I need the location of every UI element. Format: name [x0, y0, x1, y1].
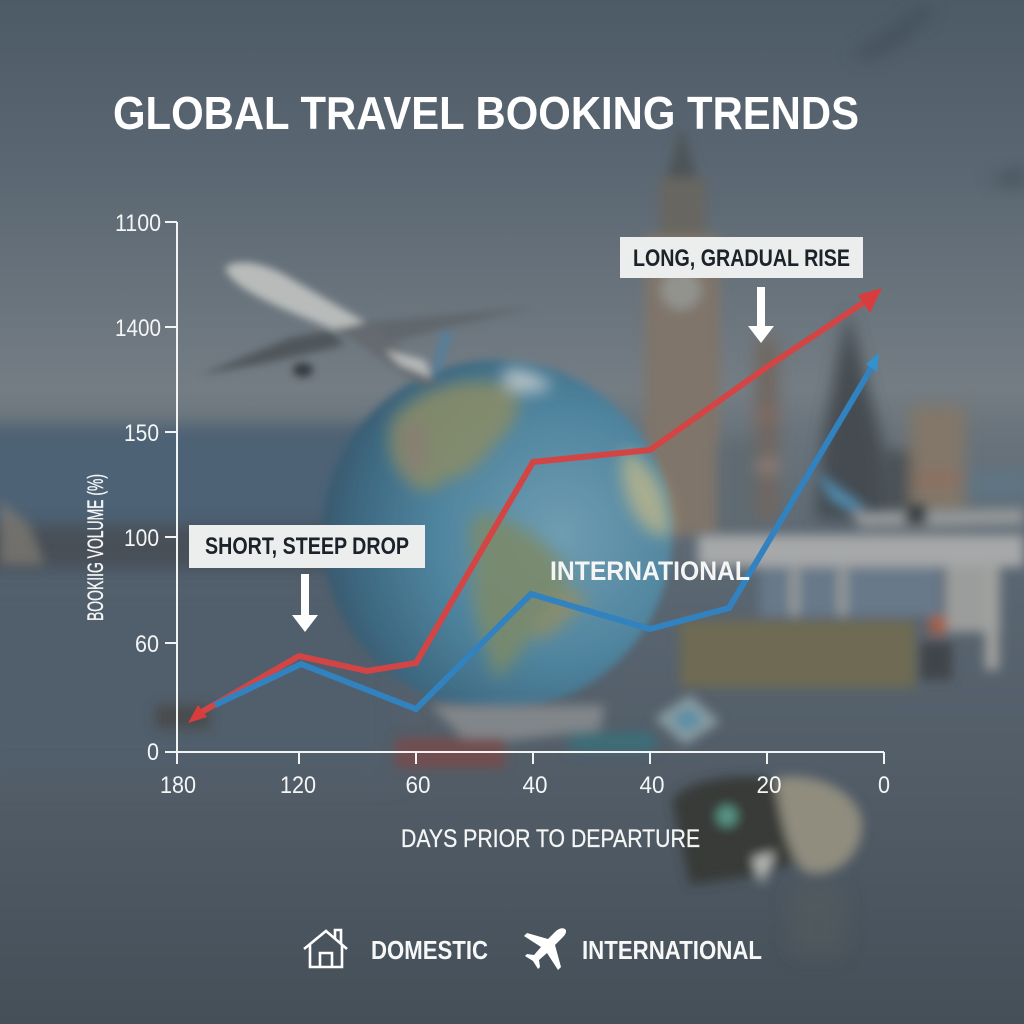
x axis with ticks and labels: 40: [522, 772, 548, 799]
skyline: [720, 310, 965, 535]
x axis with ticks and labels: 180: [160, 772, 196, 799]
y axis with ticks and labels: [115, 210, 177, 766]
arrow: gradual rise: [748, 287, 774, 343]
clock tower: [645, 125, 720, 535]
callout: short, steep drop: SHORT, STEEP DROP: [205, 533, 409, 560]
legend: [304, 928, 762, 970]
y axis with ticks and labels: 1100: [115, 210, 161, 237]
international blue line: [215, 353, 879, 709]
y axis with ticks and labels: 0: [147, 739, 159, 766]
globe: [322, 360, 672, 710]
y axis with ticks and labels: 100: [124, 525, 159, 552]
arrow: short drop: [292, 574, 318, 632]
x axis title: DAYS PRIOR TO DEPARTURE: [401, 825, 700, 853]
domestic red line: [188, 288, 882, 723]
y axis with ticks and labels: 1400: [115, 315, 161, 342]
icon: plane: [524, 928, 566, 970]
callout: long, gradual rise: LONG, GRADUAL RISE: [633, 245, 850, 272]
right plane and building: [680, 470, 1024, 688]
foreground clutter: [155, 695, 862, 955]
x axis with ticks and labels: 40: [640, 772, 664, 799]
title: GLOBAL TRAVEL BOOKING TRENDS: [113, 87, 859, 139]
y axis with ticks and labels: 150: [124, 420, 159, 447]
line label: international: INTERNATIONAL: [550, 556, 750, 586]
x axis with ticks and labels: 120: [280, 772, 316, 799]
legend label: domestic: DOMESTIC: [371, 935, 488, 965]
callout: long, gradual rise: [620, 237, 863, 278]
x axis with ticks and labels: 60: [406, 772, 430, 799]
x axis with ticks and labels: 20: [756, 772, 782, 799]
legend label: international: INTERNATIONAL: [582, 935, 762, 965]
distant plane: [850, 5, 935, 60]
callout: short, steep drop: [189, 525, 425, 568]
y axis title: BOOKIIG VOLUME (%): [83, 474, 108, 621]
x axis with ticks and labels: 0: [878, 772, 890, 799]
y axis with ticks and labels: 60: [135, 631, 159, 658]
x axis with ticks and labels: [160, 752, 890, 799]
large plane: [200, 262, 540, 385]
icon: house: [304, 930, 347, 967]
